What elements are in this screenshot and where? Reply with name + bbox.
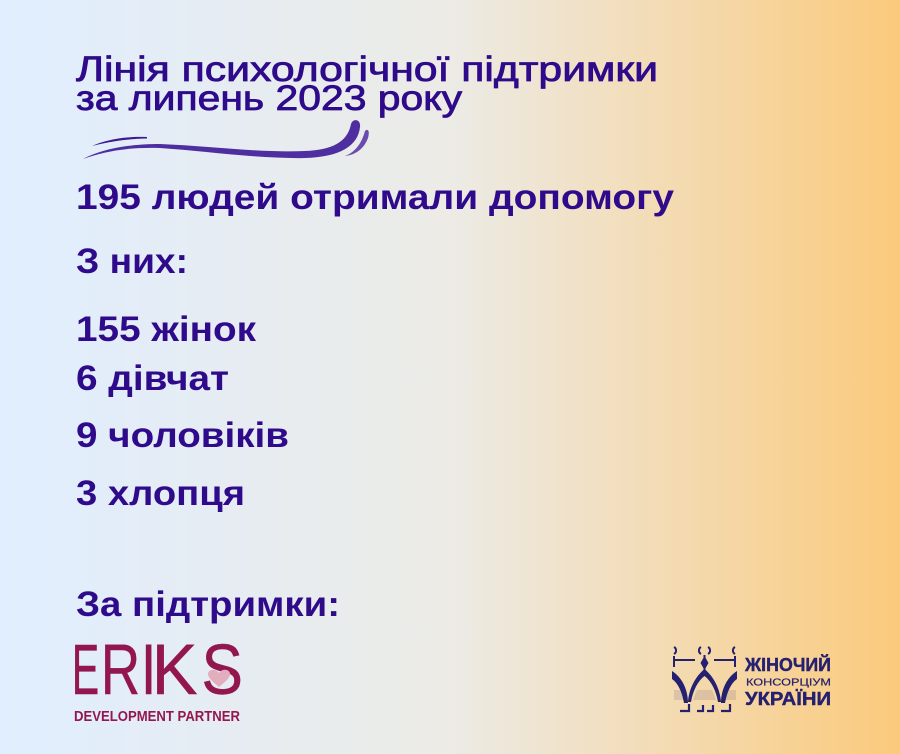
logo: Women's Consortium of Ukraine [672, 647, 831, 711]
icon: heart [208, 670, 230, 687]
boys count: 3 хлопця [76, 474, 245, 513]
title: Лінія психологічної підтримки [76, 50, 658, 89]
decorative brush underline [83, 120, 369, 159]
logo: ERIKS Development Partner: E [72, 630, 99, 710]
logo: ERIKS Development Partner: DEVELOPMENT PARTNER [74, 709, 240, 725]
girls count: 6 дівчат [76, 359, 229, 398]
support label: За підтримки: [76, 585, 340, 624]
logo: ERIKS Development Partner: S [201, 630, 243, 710]
logo: ERIKS Development Partner: I [141, 630, 157, 709]
logo: Women's Consortium of Ukraine: КОНСОРЦІУМ [746, 676, 831, 688]
of them label: З них: [76, 242, 188, 281]
men count: 9 чоловіків [76, 416, 289, 455]
logo: ERIKS Development Partner: R [101, 631, 140, 710]
total helped: 195 людей отримали допомогу [76, 178, 675, 217]
title [76, 50, 658, 118]
icon: three figures [672, 647, 737, 711]
title: за липень 2023 року [76, 79, 463, 118]
women count: 155 жінок [76, 310, 257, 349]
brand text: ЖІНОЧИЙ [744, 654, 831, 675]
logo: Women's Consortium of Ukraine: УКРАЇНИ [745, 688, 831, 709]
logo: ERIKS Development Partner [72, 630, 243, 725]
logo: ERIKS Development Partner: K [152, 630, 198, 709]
